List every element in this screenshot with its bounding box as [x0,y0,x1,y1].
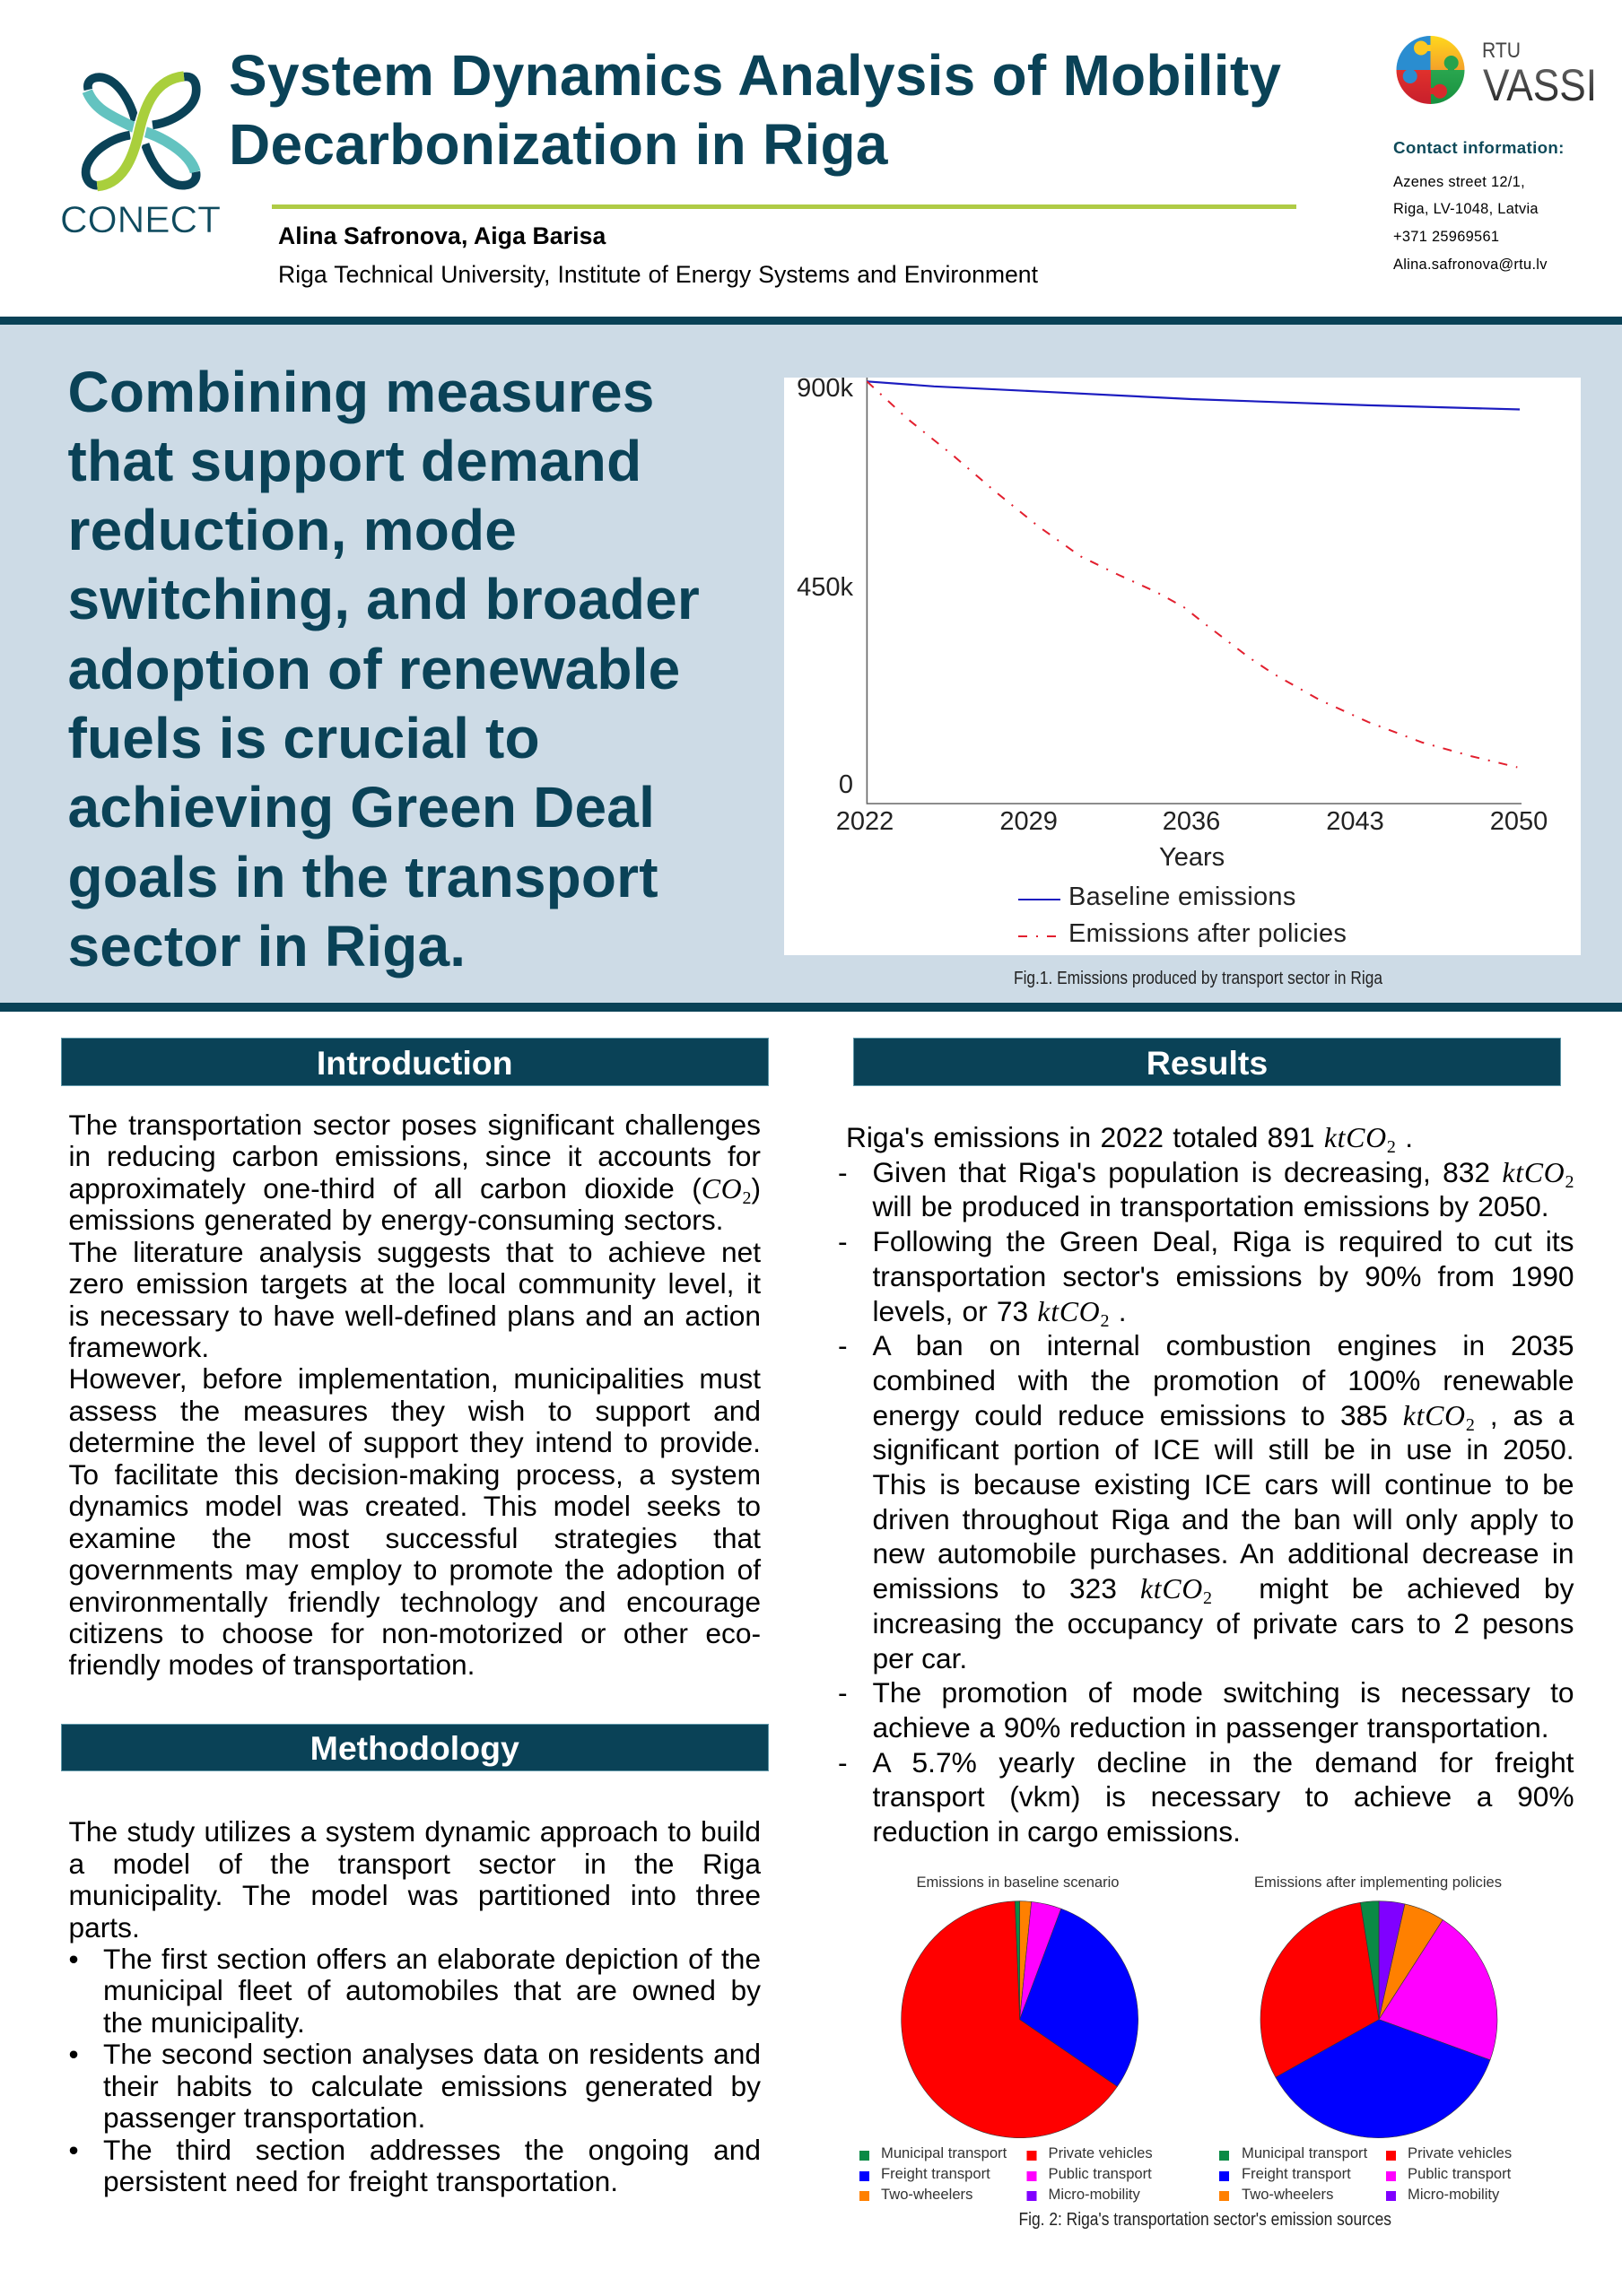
text: introduction body: dynamics model was created. This model seeks to [68,1490,761,1522]
caption: figure 1: Fig.1. Emissions produced by transport sector in Riga [1014,969,1383,988]
text: introduction body: The transportation sector poses significant challenges [68,1109,761,1141]
heading: Introduction: Introduction [317,1044,513,1082]
legend: baseline pie: Micro-mobility [1048,2186,1141,2203]
legend: baseline pie: Private vehicles [1048,2144,1153,2161]
pie title: Emissions after implementing policies [1254,1874,1502,1891]
title [229,43,1281,177]
text: results body: levels, or 73 ktCO2 . [872,1295,1127,1331]
contact information [1393,138,1565,273]
text: methodology body: municipal fleet of automobiles that are owned by [103,1974,761,2006]
authors: Alina Safronova, Aiga Barisa [278,222,606,249]
caption: figure 2: Fig. 2: Riga's transportation sector's emission sources [1019,2210,1391,2230]
legend: baseline pie: Two-wheelers [881,2186,972,2203]
legend: baseline pie: Public transport [1048,2165,1152,2182]
legend: policies pie: Public transport [1408,2165,1512,2182]
key message: that support demand [68,429,641,493]
x axis labels: 2036 [1163,807,1220,836]
text: methodology body: The study utilizes a system dynamic approach to build [68,1815,761,1848]
legend: policies pie: Freight transport [1242,2165,1351,2182]
text: introduction body: framework. [68,1331,209,1363]
panel: highlight band background [0,325,1622,1004]
text: results body: will be produced in transportation emissions by 2050. [872,1190,1548,1222]
text: methodology body: • [68,2134,79,2166]
heading: Results [853,1038,1561,1086]
text: introduction body [68,1109,761,1681]
text: results body: - [838,1746,848,1779]
legend: policies pie: Municipal transport [1242,2144,1368,2161]
text: results body: driven throughout Riga and the ban will only apply to [872,1503,1574,1535]
text: introduction body: examine the most successful strategies that [68,1522,761,1554]
y axis labels [797,374,853,799]
heading: Methodology [61,1724,768,1771]
y axis labels: 450k [797,573,853,602]
text: methodology body: the municipality. [103,2006,305,2039]
text: introduction body: environmentally friendly technology and encourage [68,1586,761,1618]
top band rule [0,317,1622,325]
text: introduction body: assess the measures they wish to support and [68,1395,761,1427]
title underline [272,204,1296,209]
icon: RTU VASSI logo: RTU [1482,39,1521,63]
x axis labels: 2050 [1490,807,1548,836]
legend: policies pie: Private vehicles [1408,2144,1512,2161]
legend: baseline pie [859,2144,1153,2203]
text: results body: This is because existing ICE cars will continue to be [872,1468,1574,1500]
heading: Methodology: Methodology [310,1729,519,1767]
text: introduction body: citizens to choose for non-motorized or other eco- [68,1617,761,1649]
email: Alina.safronova@rtu.lv [1393,257,1548,273]
legend: baseline pie: Municipal transport [881,2144,1007,2161]
text: results body: - [838,1329,848,1361]
phone: +371 25969561 [1393,228,1499,244]
legend: baseline pie: Freight transport [881,2165,990,2182]
key message: goals in the transport [68,845,658,909]
text: introduction body: To facilitate this decision-making process, a system [68,1458,761,1491]
text: results body: Following the Green Deal, Riga is required to cut its [872,1225,1574,1257]
line: emissions after policies [867,381,1517,768]
icon: CONECT logo [60,76,221,240]
affiliation: Riga Technical University, Institute of Energy Systems and Environment [278,261,1038,288]
heading: Results: Results [1147,1044,1268,1082]
text: results body: emissions to 323 ktCO2 might be achieved by [872,1572,1574,1608]
text: introduction body: in reducing carbon emissions, since it accounts for [68,1140,761,1172]
line chart: emissions [797,374,1548,948]
text: introduction body: approximately one-third of all carbon dioxide (CO2) [68,1172,761,1208]
text: results body: new automobile purchases. An additional decrease in [872,1537,1574,1570]
text: introduction body: emissions generated by energy-consuming sectors. [68,1204,723,1236]
x axis labels: 2029 [999,807,1058,836]
text: methodology body: The third section addresses the ongoing and [103,2134,761,2166]
text: results body: transportation sector's emissions by 90% from 1990 [872,1260,1574,1292]
address line 1: Azenes street 12/1, [1393,174,1525,190]
text: introduction body: determine the level of support they intend to provide. [68,1426,761,1458]
x axis labels: Years [1159,843,1225,872]
text: results body: Riga's emissions in 2022 totaled 891 ktCO2 . [846,1121,1413,1157]
key message [68,359,700,978]
text: methodology body: parts. [68,1911,140,1944]
text: methodology body: a model of the transport sector in the Riga [68,1848,761,1880]
text: results body: combined with the promotion of 100% renewable [872,1364,1574,1396]
text: introduction body: is necessary to have well-defined plans and an action [68,1300,761,1332]
title: System Dynamics Analysis of Mobility [229,43,1281,108]
text: results body: Given that Riga's population is decreasing, 832 ktCO2 [872,1156,1574,1192]
chart panel background [784,378,1581,955]
text: methodology body: • [68,2038,79,2070]
text: methodology body [68,1815,761,2197]
text: methodology body: persistent need for freight transportation. [103,2165,618,2197]
chart legend: Emissions after policies [1068,919,1347,948]
text: results body: The promotion of mode switching is necessary to [872,1676,1574,1709]
text: results body: achieve a 90% reduction in passenger transportation. [872,1711,1548,1744]
chart axes [867,378,1522,804]
pie title: Emissions in baseline scenario [917,1874,1120,1891]
y axis labels: 0 [839,770,853,799]
key message: sector in Riga. [68,914,466,978]
text: results body: A 5.7% yearly decline in the demand for freight [872,1746,1574,1779]
text: results body: reduction in cargo emissions. [872,1815,1241,1848]
icon: RTU VASSI logo [1396,36,1593,104]
key message: switching, and broader [68,567,700,631]
text: results body: - [838,1225,848,1257]
text: results body: energy could reduce emissions to 385 ktCO2 , as a [872,1399,1574,1435]
icon: CONECT logo: CONECT [60,198,221,240]
key message: Combining measures [68,359,655,423]
text: methodology body: passenger transportation. [103,2101,425,2134]
text: introduction body: friendly modes of transportation. [68,1648,475,1681]
heading: Introduction [61,1038,768,1086]
bottom band rule [0,1003,1622,1012]
legend: policies pie: Micro-mobility [1408,2186,1500,2203]
key message: reduction, mode [68,498,517,562]
text: results body: - [838,1156,848,1188]
chart legend: Baseline emissions [1068,883,1296,911]
text: methodology body: • [68,1943,79,1975]
icon: RTU VASSI logo: VASSI [1483,60,1597,110]
address line 2: Riga, LV-1048, Latvia [1393,201,1539,217]
legend: policies pie: Two-wheelers [1242,2186,1333,2203]
contact heading: Contact information: [1393,138,1565,157]
key message: adoption of renewable [68,637,680,701]
title: Decarbonization in Riga [229,112,888,177]
text: results body: per car. [872,1641,967,1674]
x axis labels [836,807,1548,872]
text: methodology body: The second section analyses data on residents and [103,2038,761,2070]
chart legend [1018,883,1347,948]
text: results body: increasing the occupancy of private cars to 2 pesons [872,1607,1574,1639]
y axis labels: 900k [797,374,853,403]
line: baseline emissions [867,381,1520,409]
text: results body: significant portion of ICE will still be in use in 2050. [872,1433,1574,1465]
text: methodology body: The first section offers an elaborate depiction of the [103,1943,761,1975]
key message: achieving Green Deal [68,775,655,839]
text: results body: A ban on internal combustion engines in 2035 [872,1329,1574,1361]
key message: fuels is crucial to [68,706,540,770]
text: methodology body: municipality. The model was partitioned into three [68,1879,761,1911]
text: introduction body: governments may employ to promote the adoption of [68,1553,761,1586]
x axis labels: 2043 [1326,807,1384,836]
legend: policies pie [1219,2144,1512,2203]
x axis labels: 2022 [836,807,894,836]
text: results body: transport (vkm) is necessary to achieve a 90% [872,1780,1574,1813]
pie chart: after policies [1254,1874,1502,2138]
text: results body [838,1121,1574,1848]
text: methodology body: their habits to calculate emissions generated by [103,2070,761,2102]
text: introduction body: However, before implementation, municipalities must [68,1362,761,1395]
text: introduction body: zero emission targets at the local community level, it [68,1267,761,1300]
pie chart: baseline scenario [902,1874,1138,2138]
text: introduction body: The literature analysis suggests that to achieve net [68,1236,761,1268]
text: results body: - [838,1676,848,1709]
